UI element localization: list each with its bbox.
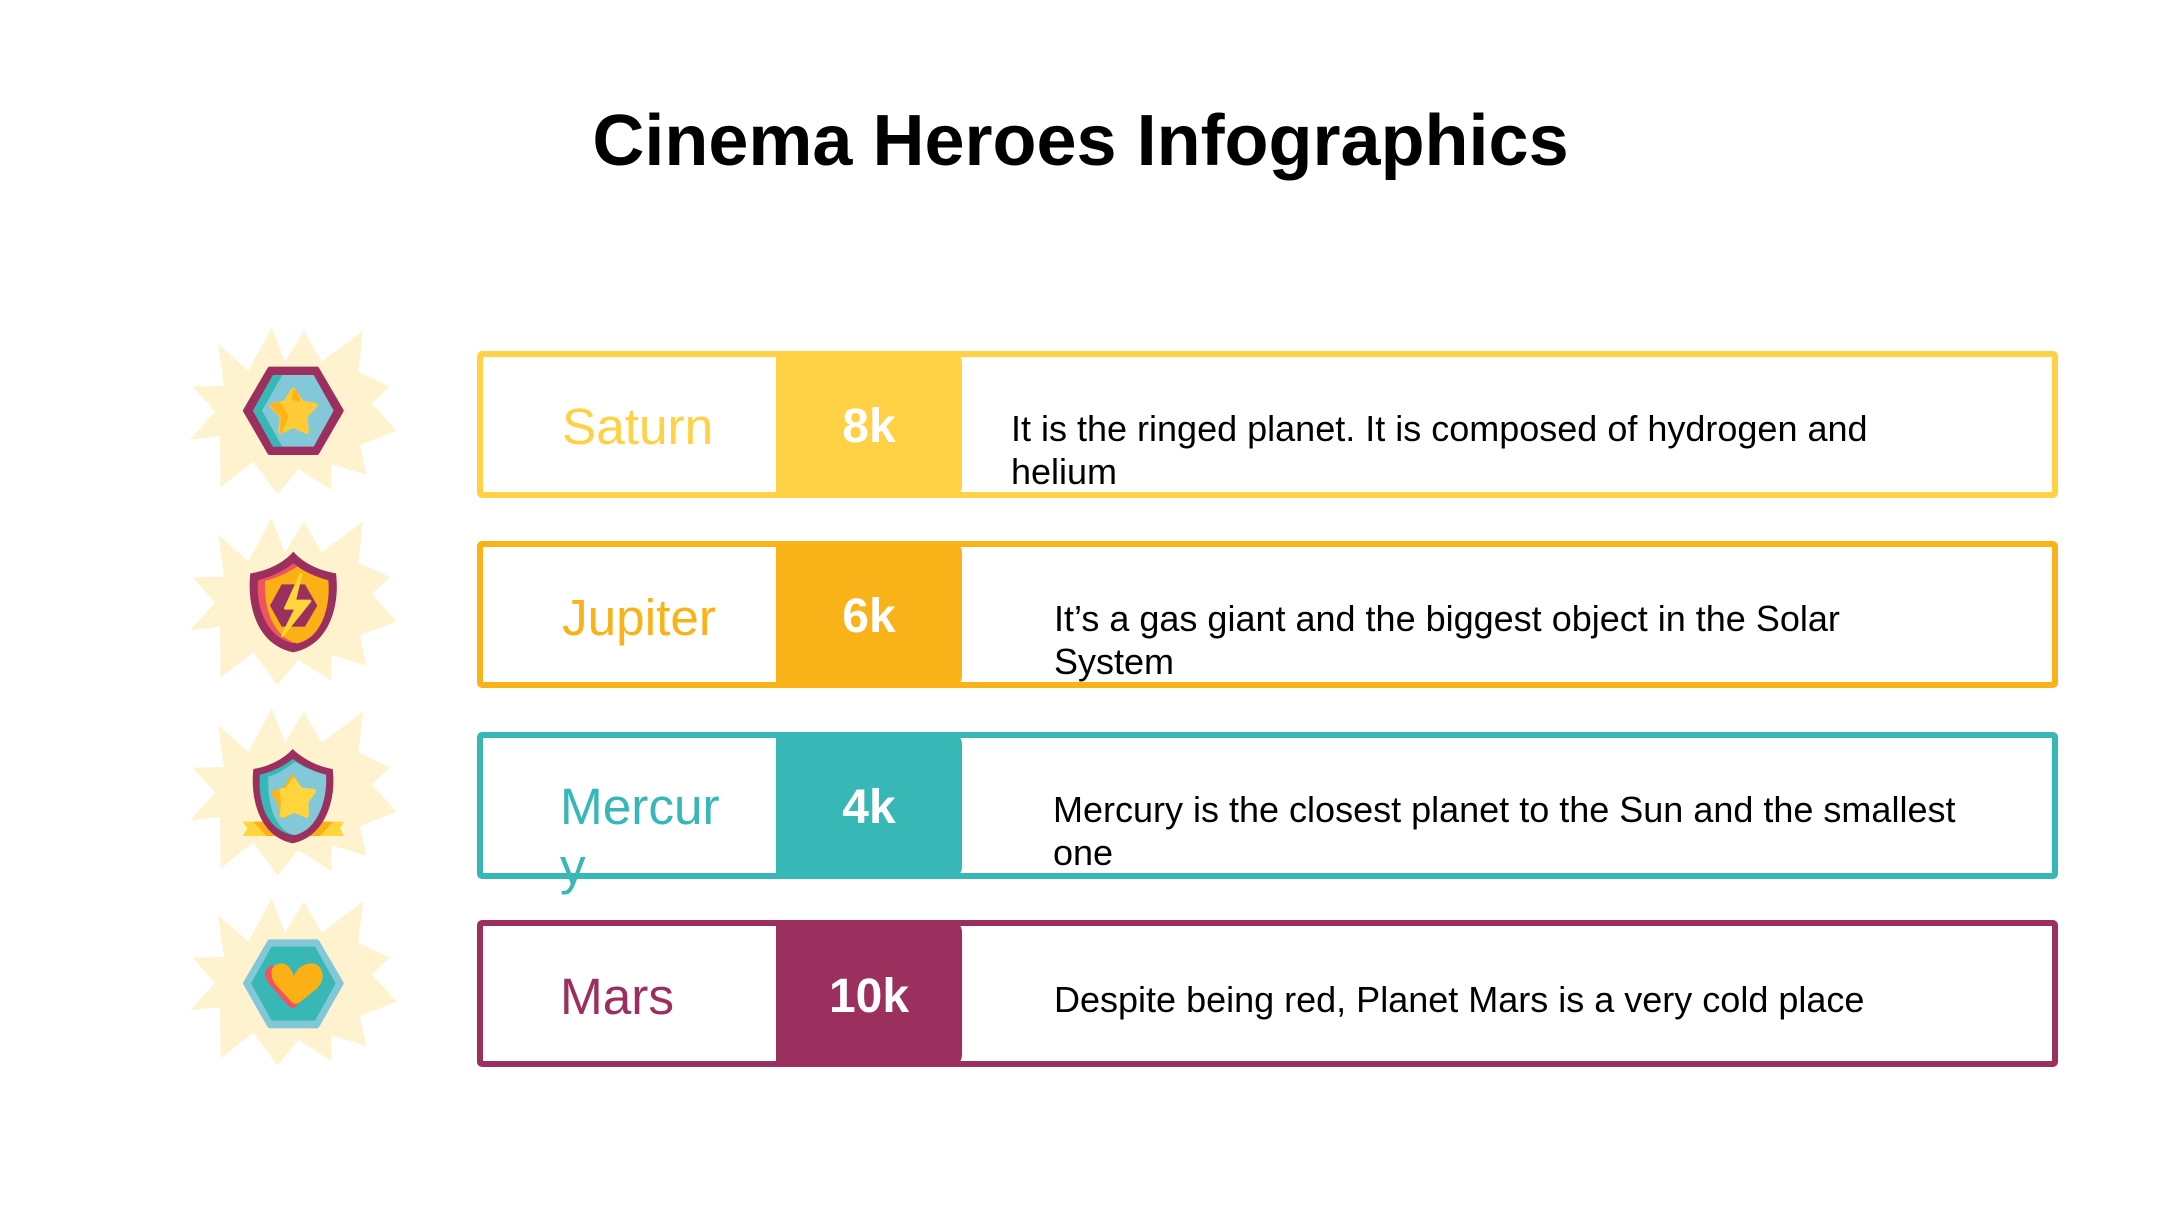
value: 8k: 8k bbox=[842, 400, 896, 453]
value block: Mercury 4k bbox=[776, 732, 962, 879]
panel: Saturn bbox=[477, 351, 2058, 498]
description: Saturn bbox=[1011, 408, 1868, 492]
value: 4k: 4k bbox=[842, 781, 896, 834]
icon: star shield with ribbon on burst bbox=[190, 708, 396, 876]
label: Mars: Mars bbox=[560, 968, 674, 1025]
description: Jupiter: It’s a gas giant and the biggest object in the Solar bbox=[1054, 598, 1840, 639]
description: Saturn: It is the ringed planet. It is composed of hydrogen and bbox=[1011, 408, 1868, 449]
value: 10k: 10k bbox=[829, 970, 909, 1023]
description: Jupiter: System bbox=[1054, 641, 1174, 682]
description: Saturn: helium bbox=[1011, 451, 1117, 492]
description: Mars: Despite being red, Planet Mars is a very cold place bbox=[1054, 979, 1864, 1020]
description: Jupiter bbox=[1054, 598, 1840, 682]
panel: Mercury bbox=[477, 732, 2058, 879]
value: 6k: 6k bbox=[842, 590, 896, 643]
description: Mercury: Mercury is the closest planet to the Sun and the smallest bbox=[1053, 789, 1955, 830]
description: Mercury: one bbox=[1053, 832, 1113, 873]
value block: Saturn 8k bbox=[776, 351, 962, 498]
description: Mercury bbox=[1053, 789, 1956, 873]
label: Jupiter: Jupiter bbox=[562, 589, 716, 646]
icon: lightning shield on burst bbox=[190, 518, 396, 685]
value block: Mars 10k bbox=[776, 920, 962, 1067]
icon: star hexagon badge on burst bbox=[190, 328, 396, 494]
panel: Jupiter bbox=[477, 541, 2058, 688]
title: Cinema Heroes Infographics bbox=[592, 101, 1569, 181]
panel: Mars bbox=[477, 920, 2058, 1067]
label: Mercury: Mercury bbox=[560, 778, 720, 895]
label: Saturn: Saturn bbox=[562, 398, 713, 455]
icon: heart hexagon on burst bbox=[190, 898, 396, 1066]
value block: Jupiter 6k bbox=[776, 541, 962, 688]
